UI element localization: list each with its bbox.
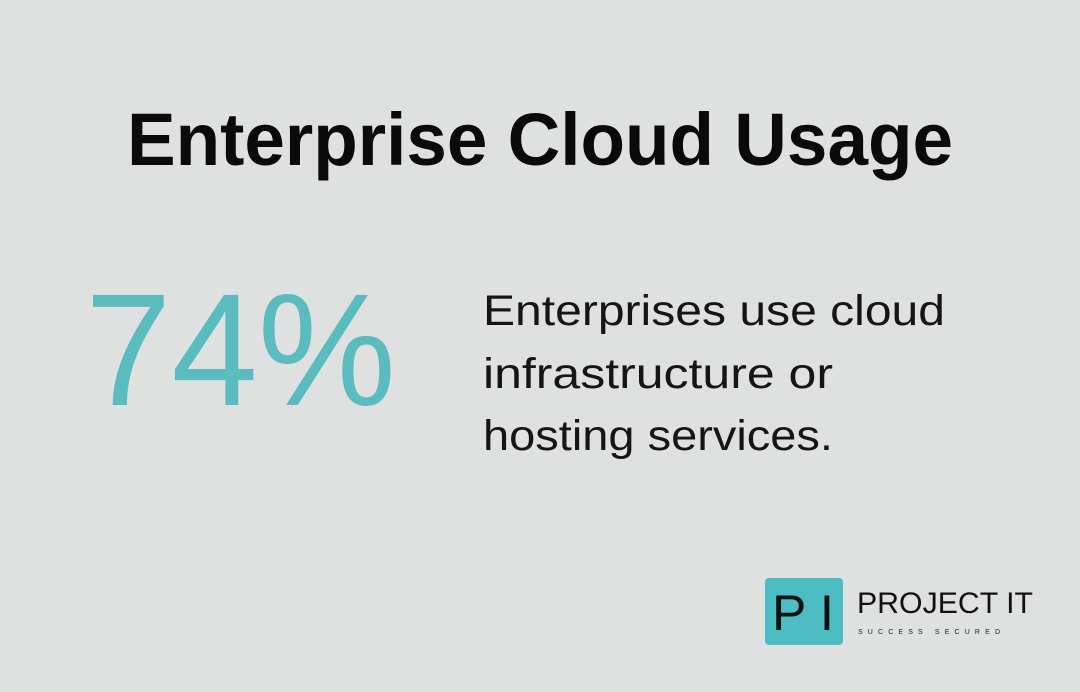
logo [765,578,1033,645]
logo icon: PI box [765,578,843,645]
stat description [483,287,945,460]
big stat: 74%: 74% [85,260,396,439]
stat description: hosting services. [483,412,833,460]
stat description: Enterprises use cloud [483,287,945,335]
logo wordmark: PROJECT IT [857,587,1033,620]
logo tagline: SUCCESS SECURED [858,629,1000,636]
logo icon: PI box: P I [772,585,834,641]
stat description: infrastructure or [483,350,833,398]
title: Enterprise Cloud Usage [127,98,953,181]
